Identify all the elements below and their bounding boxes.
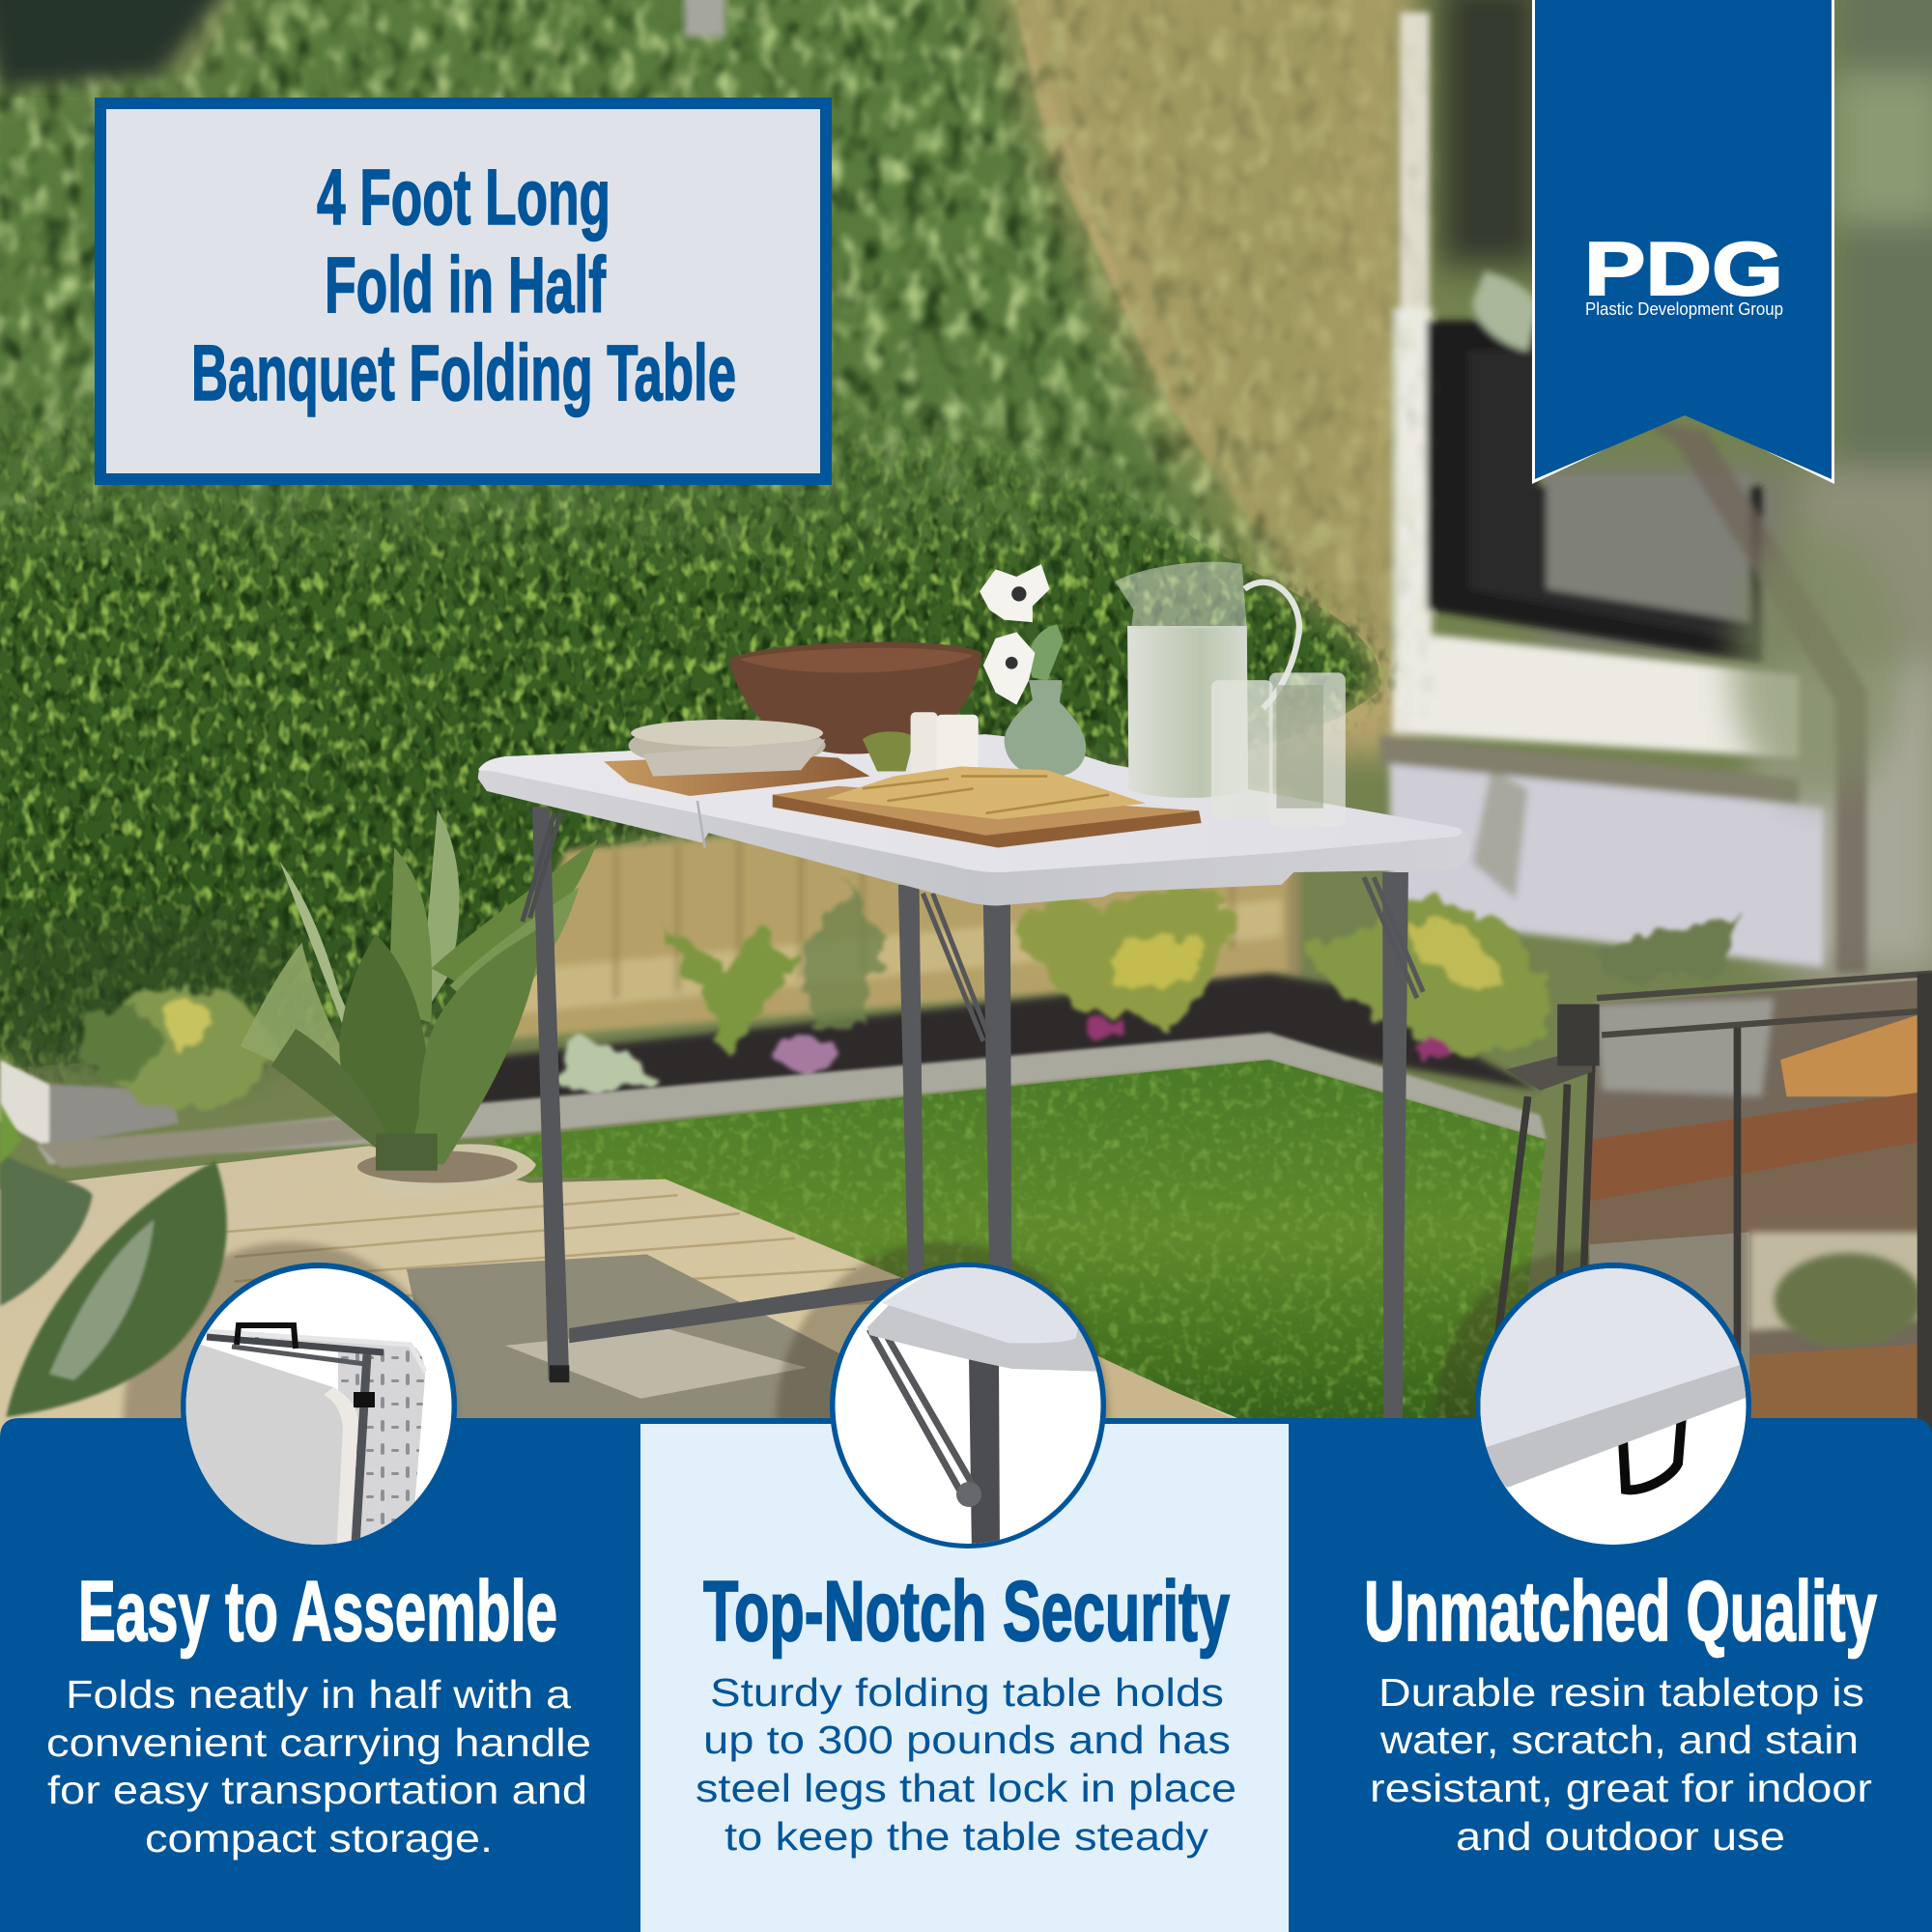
fence behind the table [480,788,1300,1041]
deck [0,1146,1293,1441]
title text [191,154,736,417]
left bush [80,985,271,1109]
lantern foreground [1485,974,1932,1441]
heading: easy to assemble: Easy to Assemble [78,1563,557,1659]
description: unmatched quality: resistant, great for indoor [1370,1766,1872,1810]
logo: PDG Plastic Development Group: Plastic Development Group [1585,299,1783,319]
title box [95,98,832,485]
description: top-notch security [696,1670,1236,1859]
panel: top-notch security [640,1256,1289,1932]
description: easy to assemble: Folds neatly in half with a [66,1672,571,1717]
panel: unmatched quality [1289,1256,1932,1932]
lawn [493,1060,1547,1441]
hedge [0,345,1380,1072]
table setting: bowl, plates, boards, crackers, vase, jug, glasses [604,562,1346,848]
description: unmatched quality [1370,1670,1872,1859]
description: top-notch security: Sturdy folding table holds [710,1670,1224,1715]
description: unmatched quality: water, scratch, and stain [1379,1718,1859,1762]
heading: top-notch security: Top-Notch Security [703,1563,1230,1659]
title text: 4 Foot Long [317,154,611,242]
garden plants behind the table [557,877,1737,1090]
inset: tabletop edge with strap [1468,1256,1758,1550]
wall, window and stone base of the house [1380,13,1866,974]
logo: PDG Plastic Development Group: PDG [1584,226,1783,311]
panel: easy to assemble [0,1263,640,1932]
table legs and braces [523,807,1423,1441]
background photo scene: garden with folding table [0,0,1932,1437]
inset: table leg and brace [830,1256,1106,1555]
description: top-notch security: up to 300 pounds and has [703,1718,1231,1762]
description: top-notch security: steel legs that lock in place [696,1766,1236,1810]
blurred tree crown at right [1731,529,1904,801]
mulch bed [456,974,1540,1109]
description: easy to assemble: compact storage. [145,1816,493,1861]
upper blurred foliage [0,0,1400,764]
brand ribbon [1532,0,1834,484]
description: unmatched quality: and outdoor use [1456,1814,1785,1859]
title text: Banquet Folding Table [191,329,736,417]
description: easy to assemble: for easy transportation and [47,1768,587,1812]
agave plant [241,810,598,1171]
soft shadows around round insets [124,1242,1731,1592]
description: top-notch security: to keep the table steady [724,1814,1209,1859]
foreground leaves [0,1103,227,1417]
title text: Fold in Half [325,242,606,329]
left dark lower hedge shade [0,913,305,1072]
description: easy to assemble [46,1672,591,1861]
description: unmatched quality: Durable resin tabletop is [1378,1670,1864,1715]
concrete bed border [0,1033,1547,1168]
inset: folded table with handle [174,1263,457,1555]
description: easy to assemble: convenient carrying handle [46,1720,591,1765]
round planter [357,1144,536,1196]
table top [478,734,1469,906]
rug on deck [407,1254,863,1441]
